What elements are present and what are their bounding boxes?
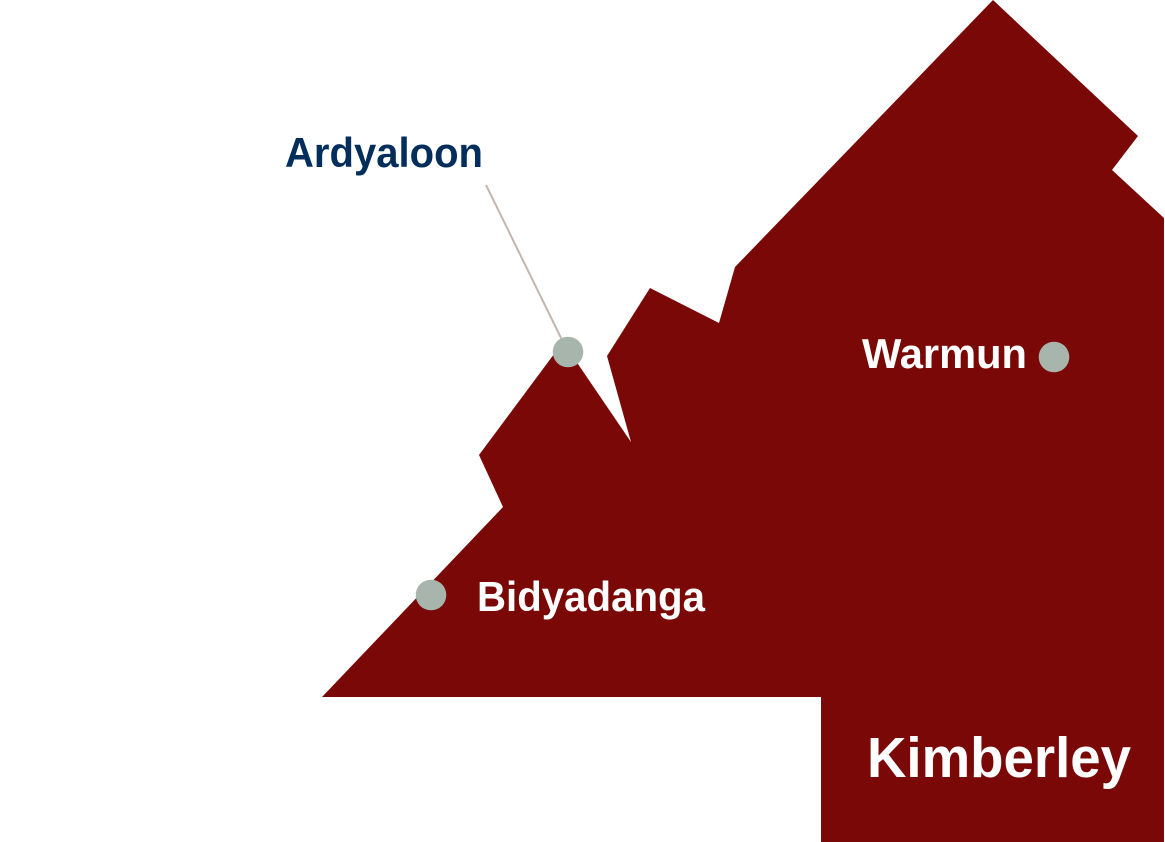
- marker: Bidyadanga: [416, 580, 446, 610]
- marker: Ardyaloon: [553, 337, 583, 367]
- heading: Kimberley: Kimberley: [867, 726, 1131, 790]
- marker: Warmun: [1039, 342, 1069, 372]
- label: Warmun: Warmun: [862, 330, 1027, 377]
- region shape: Kimberley: [322, 0, 1164, 842]
- label: Bidyadanga: Bidyadanga: [477, 573, 706, 620]
- leader line: Ardyaloon: [486, 185, 563, 342]
- label: Ardyaloon: Ardyaloon: [285, 129, 483, 176]
